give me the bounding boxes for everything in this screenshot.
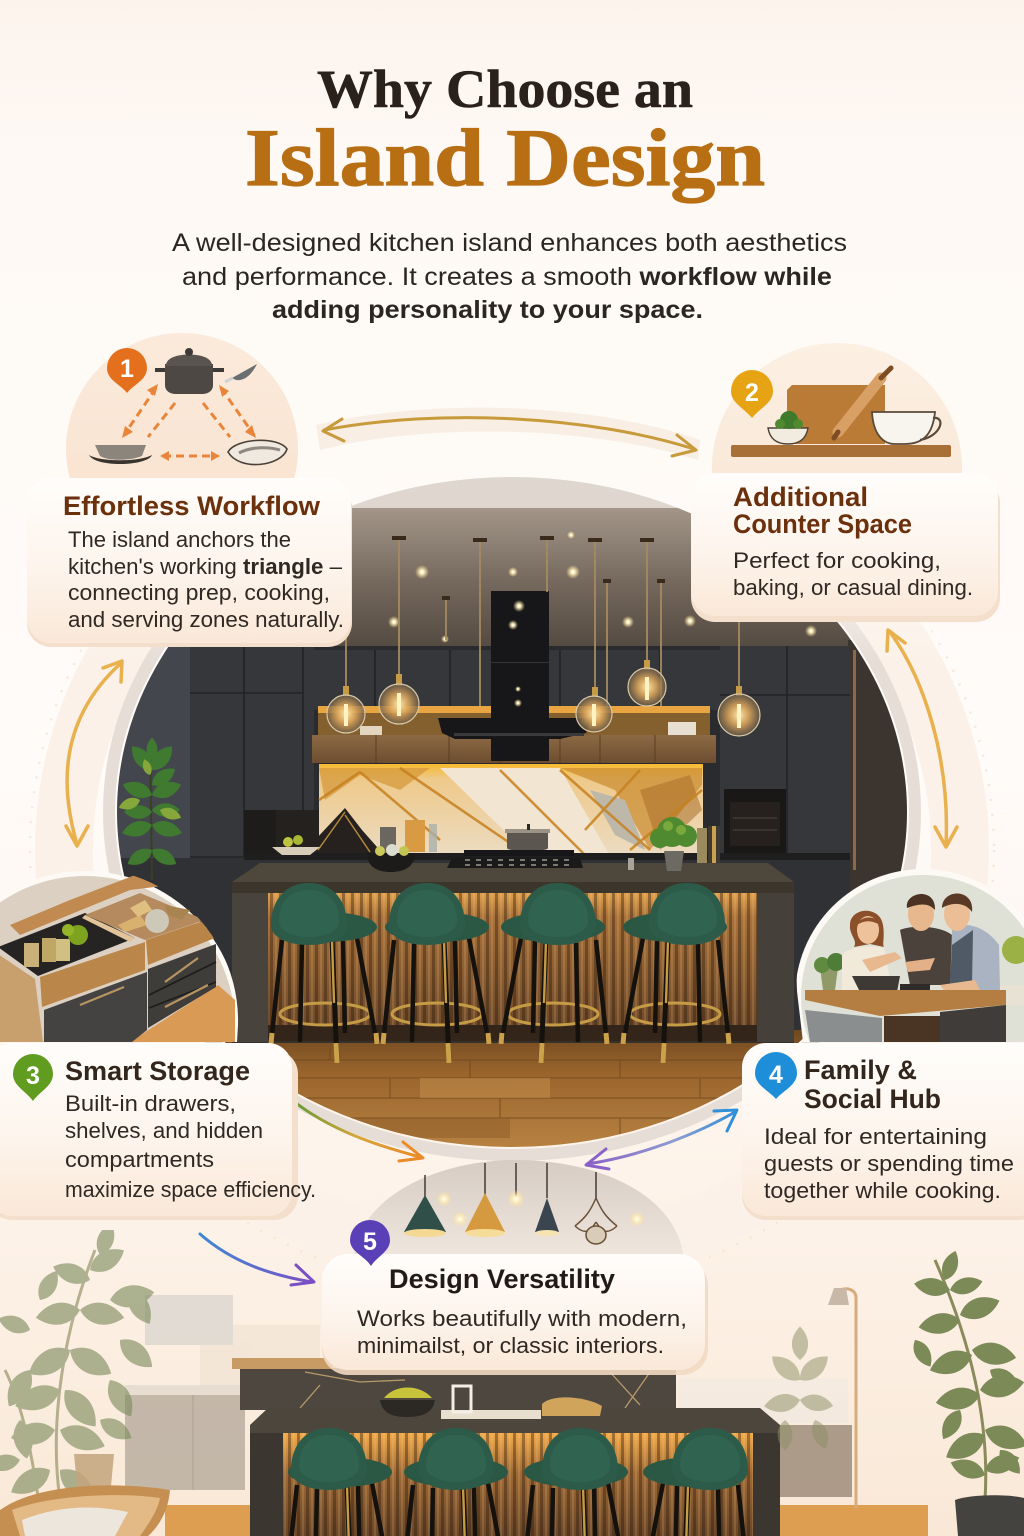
man with apron [940, 893, 1000, 992]
panel: storage photo [0, 871, 238, 1042]
man in dark shirt [900, 894, 952, 985]
right planter [955, 1495, 1024, 1536]
wood floor [165, 1505, 928, 1536]
drawer floor [130, 985, 235, 1042]
icon: cup [872, 412, 940, 444]
card 3: smart storage: Smart Storage [65, 1056, 250, 1086]
icon: bowl on plate [89, 445, 152, 464]
badge 5: 5 [363, 1228, 377, 1256]
wall niche with glow [312, 706, 716, 763]
bar stools [271, 883, 729, 1063]
icon: plate [228, 440, 287, 465]
stove and pot [852, 976, 930, 990]
side plants [814, 936, 1024, 1005]
woven planter [74, 1454, 114, 1486]
lamp: gold cone [465, 1193, 505, 1237]
icon circle 1: workflow triangle [66, 333, 298, 478]
lamp: slate cone [535, 1198, 559, 1236]
island plant [650, 817, 697, 871]
back cabinets [125, 1295, 852, 1497]
lamp: teal cone [404, 1195, 446, 1237]
card 4: family and social hub: Family & [804, 1055, 917, 1085]
card 5: design versatility: Works beautifully with modern, [357, 1306, 687, 1331]
range hood [438, 591, 592, 761]
star ceiling lights [388, 531, 817, 707]
ceiling [164, 477, 860, 653]
card 4: family and social hub: together while cooking. [764, 1178, 1001, 1203]
marble wall [232, 1358, 676, 1410]
island [232, 844, 794, 1043]
badge 4 [755, 1052, 797, 1099]
lower bar stools [286, 1428, 749, 1536]
right plant [909, 1249, 1024, 1500]
card 2: additional counter space: baking, or casual dining. [733, 575, 973, 600]
card 1: effortless workflow: and serving zones naturally. [68, 607, 344, 632]
icon: rolling pin [834, 368, 891, 438]
card 1: effortless workflow: The island anchors the [68, 527, 291, 552]
card 4: family and social hub [742, 1043, 1024, 1220]
lamp: chandelier [575, 1198, 617, 1244]
card 3: smart storage: shelves, and hidden [65, 1118, 263, 1143]
lower island [250, 1408, 780, 1536]
left plant [0, 1221, 159, 1510]
drawer contents [24, 900, 190, 967]
marble backsplash [244, 764, 703, 856]
arrows around ring [66, 418, 957, 1285]
card 2: additional counter space [691, 473, 1000, 622]
intro text: and performance. It creates a smooth workflow while [182, 263, 832, 291]
badge 5 [350, 1220, 390, 1266]
badge 4: 4 [769, 1061, 783, 1089]
potted plant left [117, 738, 184, 880]
counter [805, 990, 1006, 1042]
card 4: family and social hub: guests or spending time [764, 1151, 1014, 1176]
title: Why Choose an [317, 59, 693, 119]
card 2: additional counter space: Perfect for cooking, [733, 548, 941, 573]
badge 3 [13, 1054, 53, 1101]
card 3: smart storage [0, 1043, 316, 1220]
woman [842, 911, 902, 990]
card 1: effortless workflow [27, 478, 352, 647]
intro text: adding personality to your space. [272, 296, 703, 324]
card 2: additional counter space: Counter Space [733, 509, 912, 539]
drawer unit [0, 875, 216, 1042]
side walls [117, 640, 907, 892]
card 2: additional counter space: Additional [733, 482, 868, 512]
panel: family photo [796, 869, 1024, 1042]
card 5: design versatility [322, 1254, 708, 1375]
title: Island Design [245, 112, 765, 203]
card 4: family and social hub: Social Hub [804, 1084, 941, 1114]
card 1: effortless workflow: connecting prep, cooking, [68, 580, 330, 605]
badge 2: 2 [745, 379, 759, 407]
icon: cutting board [787, 385, 885, 444]
title [245, 59, 765, 203]
central kitchen photo [110, 470, 920, 1155]
items on lower island [380, 1386, 602, 1419]
arrow: right [887, 630, 957, 847]
icon: pot [155, 348, 257, 394]
back cabinets [120, 646, 850, 1043]
card 3: smart storage: maximize space efficiency. [65, 1177, 316, 1202]
arrow: left [66, 661, 122, 846]
icon: shelf [731, 445, 951, 457]
card 4: family and social hub: Ideal for entertaining [764, 1124, 987, 1149]
badge 3: 3 [26, 1062, 40, 1090]
card 5: design versatility: Design Versatility [389, 1264, 615, 1294]
outer ring band [28, 622, 996, 1263]
arrow: top [323, 418, 696, 456]
arrow: storage to versatility [292, 1100, 423, 1161]
badge 2 [731, 370, 773, 418]
back counter items [244, 820, 850, 863]
card 1: effortless workflow: kitchen's working triangle – [68, 554, 343, 579]
card 3: smart storage: compartments [65, 1147, 214, 1172]
top ring band swoosh [316, 408, 700, 460]
oven [724, 789, 786, 855]
dashed workflow arrows [124, 388, 254, 456]
badge 1: 1 [120, 355, 134, 383]
floor [225, 1030, 803, 1147]
bottom faded kitchen scene [0, 1221, 1024, 1536]
lamp cords [425, 1163, 596, 1200]
icon circle 2: counter items [712, 343, 962, 473]
lamp dome 5 [353, 1160, 684, 1260]
intro text: A well-designed kitchen island enhances both aesthetics [172, 229, 847, 257]
lamp glints [436, 1190, 645, 1227]
icon: herb bowl [768, 411, 808, 444]
intro text [172, 229, 847, 324]
arrow: to versatility card [200, 1234, 314, 1285]
wicker chair [0, 1485, 170, 1536]
card 3: smart storage: Built-in drawers, [65, 1091, 236, 1116]
arrow: family to versatility [586, 1110, 737, 1169]
card 1: effortless workflow: Effortless Workflow [63, 491, 321, 521]
pendant lights [327, 538, 760, 736]
badge 1 [107, 348, 147, 393]
back plant right and floor lamp [763, 1288, 856, 1508]
card 5: design versatility: minimailst, or classic interiors. [357, 1333, 664, 1358]
